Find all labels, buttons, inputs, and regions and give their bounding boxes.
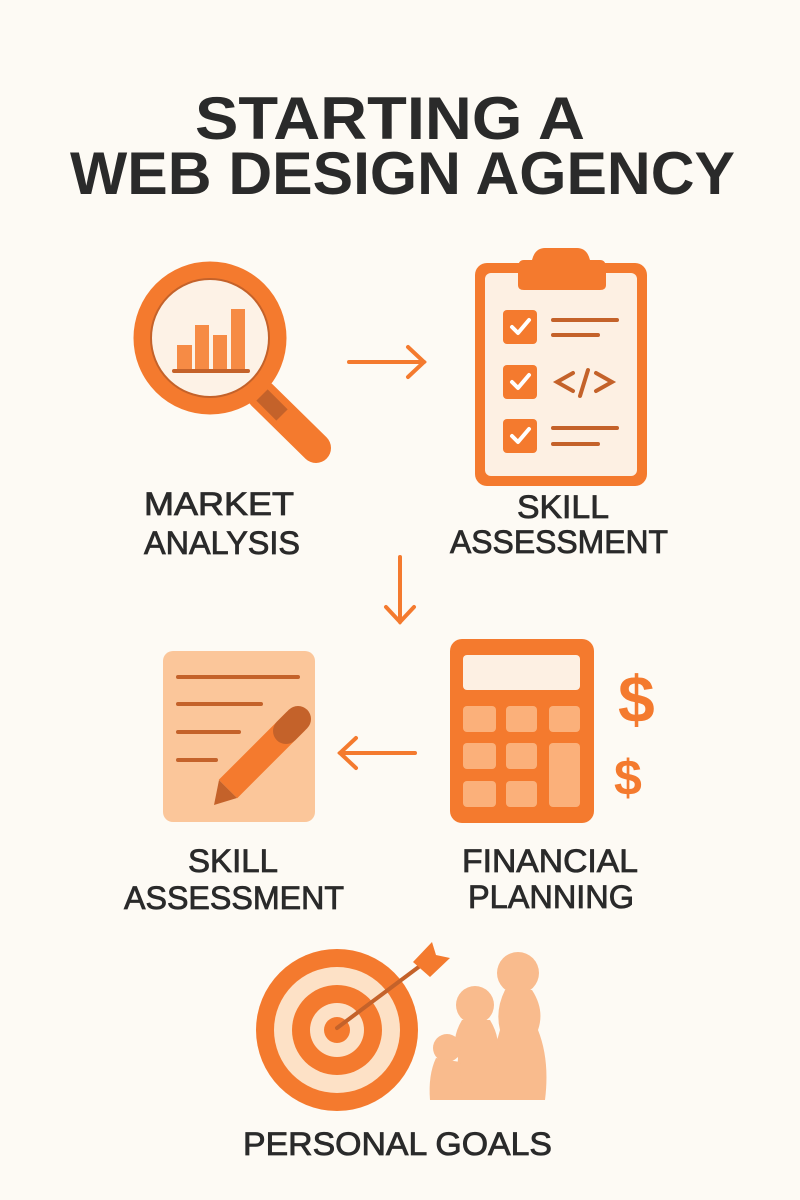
label: skill assessment (top): ASSESSMENT	[450, 524, 668, 560]
icon: target with arrow	[256, 942, 450, 1111]
label: skill assessment (bottom)	[124, 843, 344, 916]
icon: people	[430, 952, 546, 1100]
label: market analysis: ANALYSIS	[144, 525, 300, 561]
label: skill assessment (top): SKILL	[517, 489, 609, 525]
icon: dollar signs: $	[614, 750, 642, 806]
title	[70, 85, 735, 207]
title: STARTING A	[195, 85, 585, 152]
label: market analysis	[144, 486, 300, 561]
label: skill assessment (bottom): ASSESSMENT	[124, 880, 344, 916]
label: skill assessment (top)	[450, 489, 668, 560]
label: skill assessment (bottom): SKILL	[188, 843, 278, 879]
arrow: left	[340, 738, 415, 768]
arrow: right	[349, 347, 424, 377]
label: financial planning: PLANNING	[468, 879, 634, 915]
icon: calculator	[450, 639, 594, 823]
icon: clipboard checklist	[475, 248, 647, 486]
icon: dollar signs: $	[618, 662, 655, 736]
label: financial planning: FINANCIAL	[462, 843, 638, 879]
label: personal goals: PERSONAL GOALS	[243, 1126, 552, 1162]
icon: notepad with pencil	[163, 651, 315, 822]
icon: magnifier with bar chart	[142, 270, 316, 448]
label: financial planning	[462, 843, 638, 915]
title: WEB DESIGN AGENCY	[70, 140, 735, 207]
label: market analysis: MARKET	[144, 486, 294, 522]
icon: dollar signs	[614, 662, 655, 806]
arrow: down	[386, 557, 414, 622]
